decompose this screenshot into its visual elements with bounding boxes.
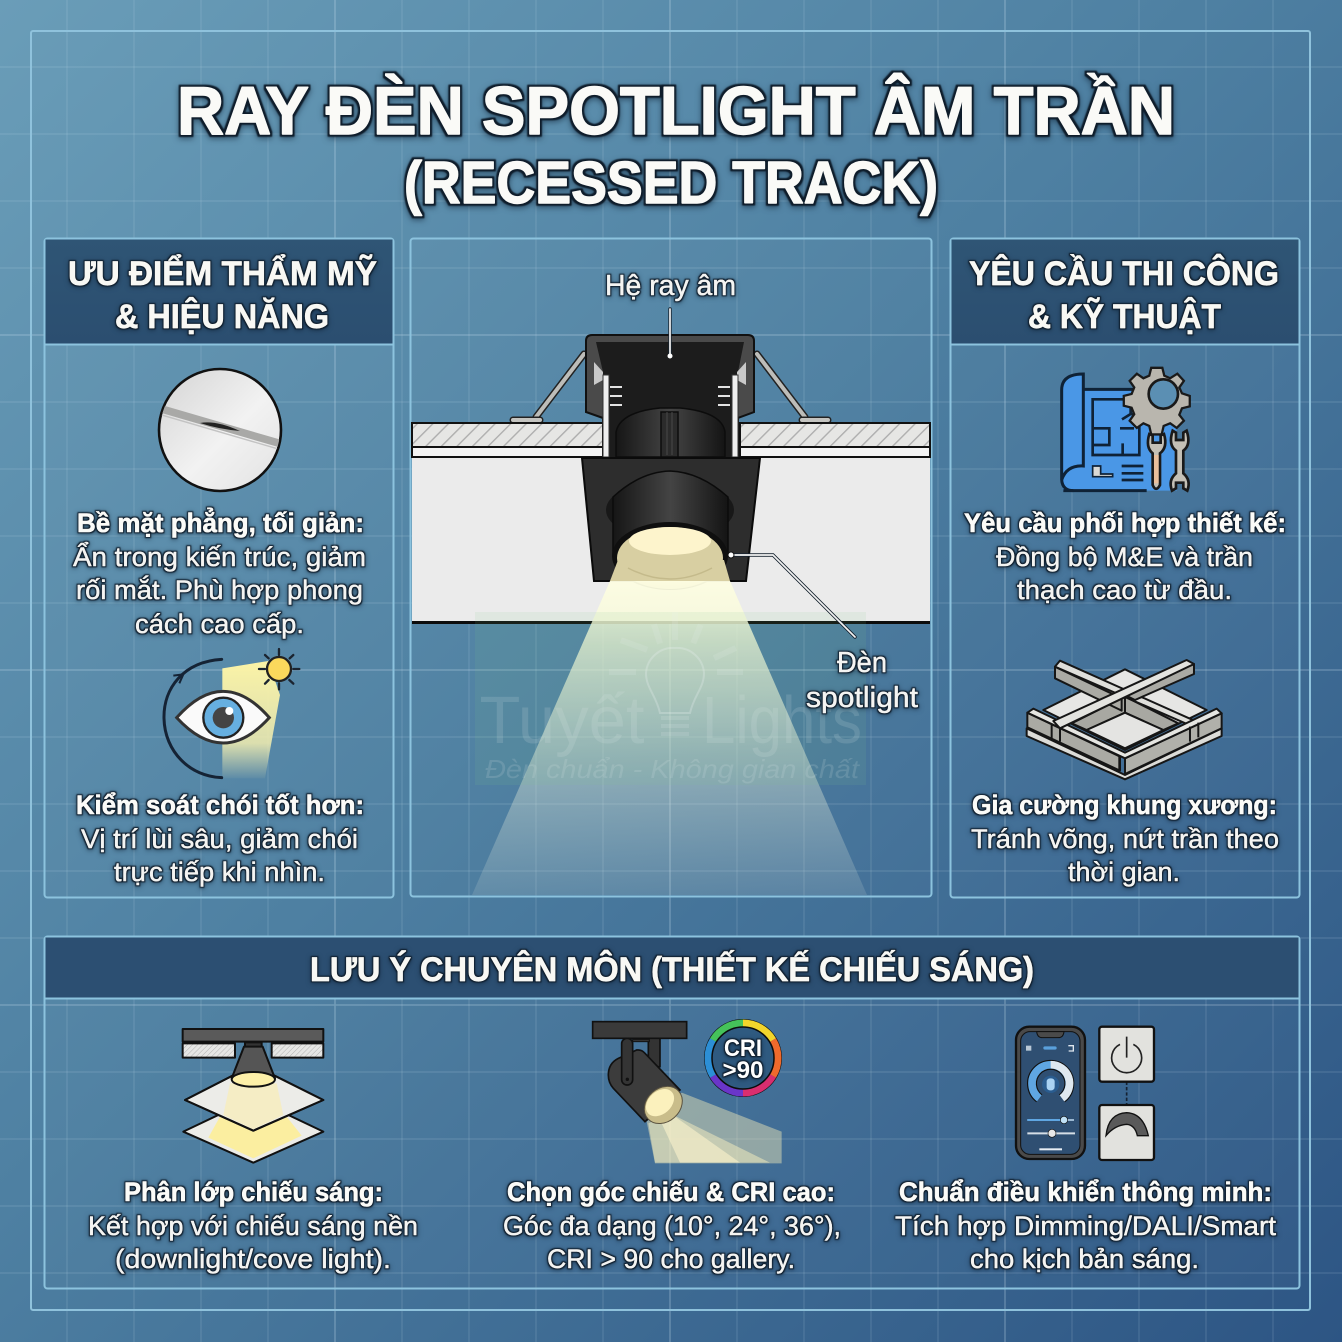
icon: blueprint, gear and wrenches	[1062, 368, 1190, 491]
panel: lưu ý chuyên môn	[44, 936, 1300, 1288]
label: hệ ray âm: Hệ ray âm	[605, 270, 736, 302]
text: chọn góc chiếu: Góc đa dạng (10°, 24°, 36°),	[503, 1211, 841, 1241]
icon: smart control phone and switches	[1016, 1027, 1154, 1160]
watermark	[475, 612, 866, 785]
heading: ưu điểm: ƯU ĐIỂM THẨM MỸ	[68, 255, 377, 293]
icon: eye with glare	[164, 649, 299, 778]
text: phối hợp thiết kế: Đồng bộ M&E và trần	[996, 542, 1253, 572]
watermark: Tuyết	[480, 683, 645, 758]
illustration: recessed track cross section	[412, 309, 930, 895]
text: gia cường khung xương: Tránh võng, nứt trần theo	[971, 824, 1279, 854]
badge: CRI > 90	[705, 1020, 781, 1096]
heading: ưu điểm: & HIỆU NĂNG	[115, 298, 329, 336]
text: chuẩn điều khiển: Chuẩn điều khiển thông minh:	[899, 1177, 1272, 1207]
icon: ceiling frame reinforcement	[1027, 660, 1222, 779]
heading: yêu cầu	[951, 240, 1299, 344]
text: chuẩn điều khiển: Tích hợp Dimming/DALI/Smart	[895, 1211, 1276, 1241]
heading: yêu cầu: YÊU CẦU THI CÔNG	[969, 254, 1279, 293]
panel: ưu điểm thẩm mỹ và hiệu năng	[44, 238, 394, 898]
title	[177, 72, 1175, 216]
text: gia cường khung xương: thời gian.	[1068, 857, 1180, 887]
text: phân lớp chiếu sáng: Kết hợp với chiếu sáng nền	[88, 1211, 418, 1241]
text: kiểm soát chói: Kiểm soát chói tốt hơn:	[76, 790, 364, 820]
icon: flat surface disc	[155, 369, 285, 491]
text: bề mặt phẳng: Ẩn trong kiến trúc, giảm	[73, 541, 366, 572]
text: chuẩn điều khiển	[895, 1177, 1276, 1274]
panel: cross-section diagram	[410, 238, 932, 896]
title: RAY ĐÈN SPOTLIGHT ÂM TRẦN	[177, 72, 1175, 149]
light beam	[472, 581, 867, 895]
text: kiểm soát chói	[76, 790, 364, 887]
text: gia cường khung xương	[971, 790, 1279, 887]
text: phối hợp thiết kế: Yêu cầu phối hợp thiết kế:	[964, 508, 1286, 538]
text: chọn góc chiếu: CRI > 90 cho gallery.	[547, 1244, 795, 1274]
label: đèn spotlight: spotlight	[806, 682, 918, 714]
heading: yêu cầu: & KỸ THUẬT	[1028, 298, 1221, 336]
text: phân lớp chiếu sáng: Phân lớp chiếu sáng:	[124, 1177, 383, 1207]
panel: yêu cầu thi công và kỹ thuật	[950, 238, 1300, 898]
title: (RECESSED TRACK)	[404, 150, 938, 216]
label: đèn spotlight: Đèn	[837, 647, 887, 679]
badge: CRI > 90: CRI	[724, 1035, 762, 1062]
ceiling board	[412, 423, 930, 457]
spotlight trim	[582, 458, 760, 581]
gear	[1124, 368, 1190, 434]
heading: ưu điểm	[45, 240, 393, 344]
text: gia cường khung xương: Gia cường khung xương:	[972, 790, 1277, 820]
text: phối hợp thiết kế: thạch cao từ đầu.	[1017, 575, 1232, 605]
text: phân lớp chiếu sáng	[88, 1177, 418, 1274]
text: chuẩn điều khiển: cho kịch bản sáng.	[970, 1244, 1199, 1274]
text: chọn góc chiếu	[503, 1177, 841, 1274]
text: bề mặt phẳng	[73, 506, 366, 639]
heading: lưu ý chuyên môn	[45, 938, 1299, 998]
badge: CRI > 90: >90	[722, 1057, 764, 1084]
text: phân lớp chiếu sáng: (downlight/cove light).	[115, 1244, 391, 1274]
spring clips	[513, 354, 828, 420]
wrenches	[1148, 434, 1165, 489]
watermark: Lights	[702, 683, 862, 758]
text: kiểm soát chói: trực tiếp khi nhìn.	[114, 857, 325, 887]
text: chọn góc chiếu: Chọn góc chiếu & CRI cao:	[507, 1177, 835, 1207]
text: phối hợp thiết kế	[964, 508, 1286, 605]
track housing	[586, 335, 754, 457]
icon: layered lighting	[183, 1029, 323, 1163]
icon: track spotlight	[593, 1022, 782, 1163]
heading: lưu ý chuyên môn: LƯU Ý CHUYÊN MÔN (THIẾT KẾ CHIẾU SÁNG)	[310, 950, 1034, 989]
text: bề mặt phẳng: cách cao cấp.	[135, 609, 304, 639]
text: bề mặt phẳng: rối mắt. Phù hợp phong	[76, 574, 363, 605]
text: kiểm soát chói: Vị trí lùi sâu, giảm chói	[81, 824, 358, 854]
callout line: đèn spotlight	[728, 552, 855, 637]
text: bề mặt phẳng: Bề mặt phẳng, tối giản:	[77, 506, 364, 538]
label: đèn spotlight	[806, 647, 918, 714]
watermark: Đèn chuẩn - Không gian chất	[485, 754, 861, 784]
callout line: hệ ray âm	[668, 309, 672, 358]
